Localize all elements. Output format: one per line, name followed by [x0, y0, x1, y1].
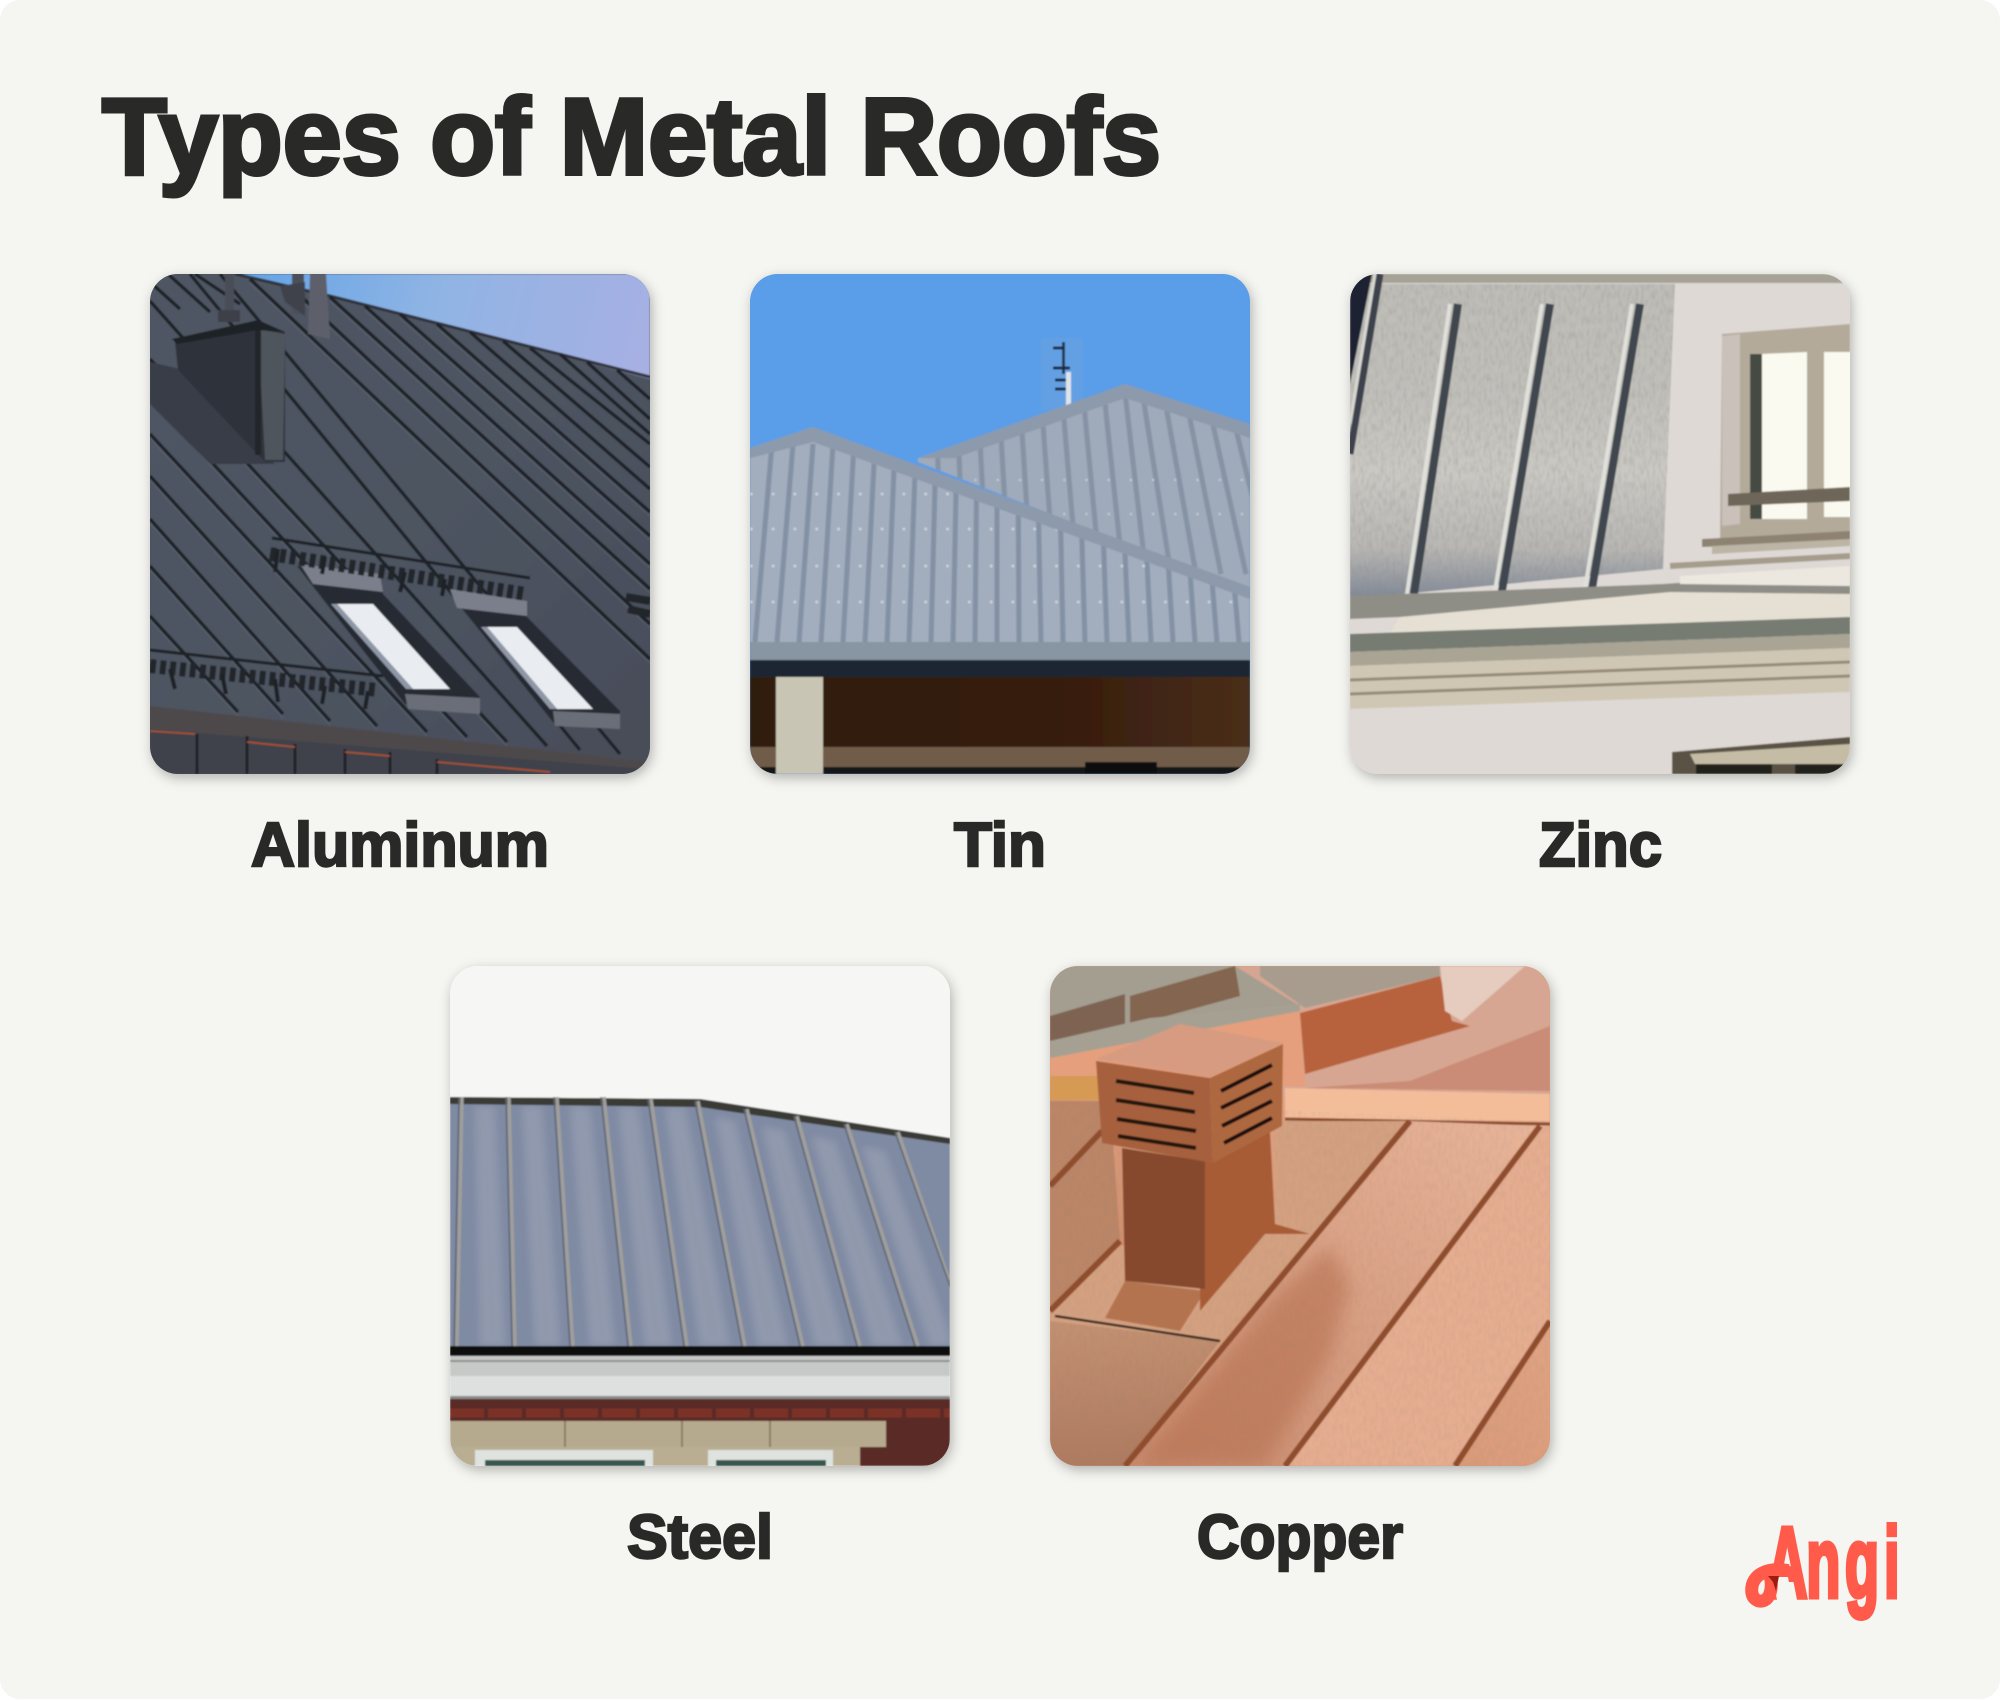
- zinc panels: [1350, 284, 1675, 599]
- label: Zinc: Zinc: [1539, 811, 1662, 880]
- front roof: [750, 424, 1250, 644]
- roof vent: [1096, 1024, 1310, 1331]
- photo: steel roof: [450, 966, 950, 1466]
- label: Steel: Steel: [627, 1503, 773, 1572]
- upper background: [1050, 966, 1550, 1100]
- chimney: [150, 274, 330, 464]
- photo: aluminum roof: [150, 274, 650, 774]
- snow guards: [150, 538, 650, 709]
- photo: zinc roof: [1350, 274, 1854, 774]
- skylights: [297, 564, 620, 729]
- photo: copper roof: [1050, 966, 1550, 1466]
- copper panels: [1050, 1101, 1550, 1466]
- logo: Angi: Angi: [1767, 1508, 1900, 1619]
- back roof: [917, 398, 1250, 588]
- eave: [150, 706, 650, 774]
- ridge strip: [1285, 1088, 1550, 1121]
- antenna: [1041, 338, 1083, 410]
- title: Types of Metal Roofs: [102, 76, 1161, 198]
- window upper: [1702, 324, 1854, 554]
- label: Aluminum: Aluminum: [251, 811, 549, 880]
- gutter and cornice: [1350, 582, 1850, 620]
- photo: tin roof: [750, 274, 1271, 774]
- label: Tin: Tin: [954, 811, 1046, 880]
- window lower: [1672, 737, 1850, 774]
- label: Copper: Copper: [1197, 1503, 1403, 1572]
